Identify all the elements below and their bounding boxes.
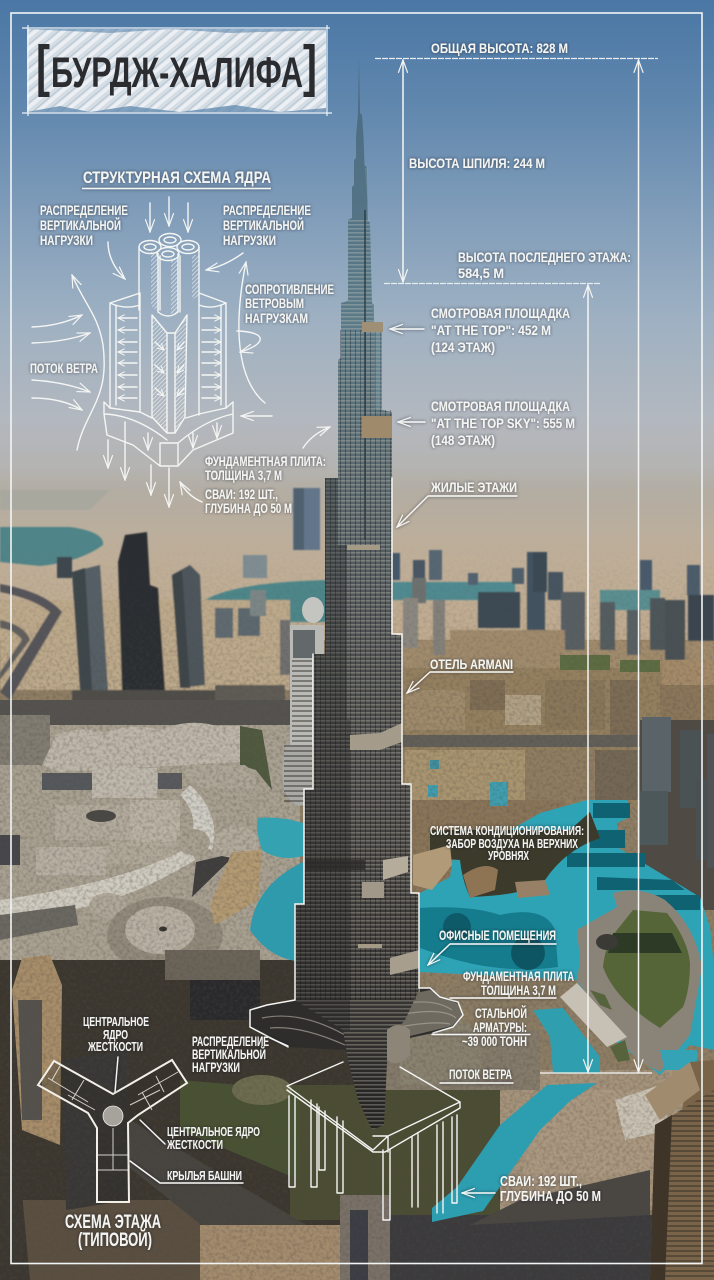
tower: shaded left shaft xyxy=(295,478,350,1030)
dimension: ground line xyxy=(540,1072,652,1074)
label: piles (diagram): ГЛУБИНА ДО 50 М xyxy=(205,500,292,516)
title text: ] xyxy=(303,34,317,98)
tower: lit tiers right xyxy=(383,990,462,1042)
heading: floor plan: (ТИПОВОЙ) xyxy=(78,1229,152,1251)
label: central core side xyxy=(140,1120,260,1152)
tower: dark plant band left xyxy=(305,860,365,870)
tower: main silhouette xyxy=(295,57,419,1130)
callout: air conditioning: УРОВНЯХ xyxy=(488,848,529,863)
label: wind resistance: СОПРОТИВЛЕНИЕ xyxy=(245,281,334,297)
background: desert xyxy=(0,462,714,702)
callout: residential floors: ЖИЛЫЕ ЭТАЖИ xyxy=(430,479,517,495)
core: wind arrows xyxy=(32,262,272,450)
callout: At the Top Sky: "AT THE TOP SKY": 555 М xyxy=(431,415,575,431)
background: sky xyxy=(0,0,714,500)
tower: window grid xyxy=(295,220,419,1130)
tower: mechanical band 2 xyxy=(383,856,408,880)
label: central core top: ЖЕСТКОСТИ xyxy=(87,1039,143,1054)
tower base outline left xyxy=(250,654,313,1047)
core: curved load arrows xyxy=(108,242,243,279)
tower: mechanical band 3 xyxy=(362,882,384,898)
floor inner partitions xyxy=(48,1066,178,1170)
label: central core top: ЦЕНТРАЛЬНОЕ xyxy=(83,1014,149,1029)
background: city quarter right of the tower xyxy=(395,655,714,910)
dimension: top floor height: 584,5 М xyxy=(458,265,504,281)
title plate xyxy=(22,25,332,116)
core: V block hatch xyxy=(152,315,187,433)
label: tower wings: КРЫЛЬЯ БАШНИ xyxy=(167,1168,242,1183)
callout: At the Top: "AT THE TOP": 452 М xyxy=(431,322,551,338)
label: wind resistance: НАГРУЗКАМ xyxy=(245,310,308,326)
label: vertical load left xyxy=(40,202,128,248)
background: ground, parks and plaza xyxy=(0,950,714,1280)
title text: БУРДЖ-ХАЛИФА xyxy=(51,49,303,97)
label: vertical load right: ВЕРТИКАЛЬНОЙ xyxy=(223,216,304,233)
label: foundation slab (diagram) xyxy=(205,453,326,483)
floor hub xyxy=(103,1106,123,1126)
callout: At the Top Sky xyxy=(398,398,575,448)
callout: air conditioning xyxy=(430,823,584,863)
background: base ground xyxy=(0,640,714,1280)
core: internal load arrows xyxy=(118,318,221,398)
label: vertical load left: ВЕРТИКАЛЬНОЙ xyxy=(40,216,121,233)
callout: piles: ГЛУБИНА ДО 50 М xyxy=(500,1188,601,1205)
core: top load arrows xyxy=(150,197,188,232)
label: vertical load right: РАСПРЕДЕЛЕНИЕ xyxy=(223,202,311,218)
label: foundation slab (diagram): ТОЛЩИНА 3,7 М xyxy=(205,467,282,483)
callout: piles: СВАИ: 192 ШТ., xyxy=(500,1173,582,1190)
callout: vertical load distribution: ВЕРТИКАЛЬНОЙ xyxy=(192,1045,266,1062)
callout: piles xyxy=(462,1173,601,1205)
callout: office floors: ОФИСНЫЕ ПОМЕЩЕНИЯ xyxy=(439,927,556,943)
callout: Armani hotel xyxy=(407,656,513,693)
callout: steel reinforcement: ~39 000 ТОНН xyxy=(462,1033,527,1049)
callout: vertical load distribution: НАГРУЗКИ xyxy=(192,1059,240,1075)
tower: concrete drum xyxy=(387,1025,410,1063)
diagram: foundation plate and piles xyxy=(287,1062,460,1220)
callout: air conditioning: ЗАБОР ВОЗДУХА НА ВЕРХНИХ xyxy=(446,836,578,851)
tower: mechanical band 1 xyxy=(350,723,402,750)
tower: vertical mullions xyxy=(295,330,419,1000)
dimension: spire height: ВЫСОТА ШПИЛЯ: 244 М xyxy=(409,155,545,171)
callout: vertical load distribution xyxy=(192,1033,288,1075)
background: island and green park xyxy=(413,812,702,1072)
tower: gold sky-lobby band xyxy=(362,322,383,332)
label: vertical load left: НАГРУЗКИ xyxy=(40,232,93,248)
label: piles (diagram) xyxy=(205,486,292,516)
callout: steel reinforcement: АРМАТУРЫ: xyxy=(473,1019,527,1035)
core: centre V block xyxy=(152,315,187,433)
callout: Armani hotel: ОТЕЛЬ ARMANI xyxy=(430,656,513,672)
tower: podium tiers xyxy=(250,988,463,1060)
heading: structural core scheme: СТРУКТУРНАЯ СХЕМА ЯДРА xyxy=(83,168,271,187)
tower: dark centre slot xyxy=(364,210,366,540)
label: wind resistance: ВЕТРОВЫМ xyxy=(245,295,304,311)
texture: city detail noise xyxy=(0,540,714,1280)
label: vertical load right xyxy=(223,202,311,248)
tower: tier lines xyxy=(262,1002,456,1045)
tower: lit right edge upper xyxy=(365,168,382,410)
title text: [ xyxy=(36,34,50,98)
label: central core side: ЖЕСТКОСТИ xyxy=(166,1137,223,1152)
diagram: typical floor plan xyxy=(38,1060,187,1202)
tower: centre wing top xyxy=(347,545,380,550)
dimension: top floor height xyxy=(384,249,631,1072)
dimension: total height: ОБЩАЯ ВЫСОТА: 828 М xyxy=(431,40,568,56)
background: far city and towers xyxy=(0,488,714,725)
label: vertical load left: РАСПРЕДЕЛЕНИЕ xyxy=(40,202,128,218)
background: mall district xyxy=(0,700,300,990)
plate outline xyxy=(287,1062,460,1152)
tower: Burj Khalifa xyxy=(250,57,463,1130)
label: piles (diagram): СВАИ: 192 ШТ., xyxy=(205,486,278,502)
background: right-side high-rises xyxy=(640,717,714,1280)
background: lagoons and fountain pools xyxy=(250,800,714,1222)
callout: steel reinforcement: СТАЛЬНОЙ xyxy=(475,1004,527,1021)
label: wind flow: ПОТОК ВЕТРА xyxy=(30,360,98,376)
label: central core side: ЦЕНТРАЛЬНОЕ ЯДРО xyxy=(167,1124,260,1139)
tower: top of third wing xyxy=(358,944,382,948)
diagram: structural core xyxy=(32,197,330,507)
label: vertical load right: НАГРУЗКИ xyxy=(223,232,276,248)
dimension: top floor height: ВЫСОТА ПОСЛЕДНЕГО ЭТАЖА: xyxy=(458,249,631,265)
label: central core top xyxy=(83,1014,149,1092)
callout: At the Top xyxy=(390,305,570,355)
core: foundation arrows xyxy=(108,422,217,507)
label: central core top: ЯДРО xyxy=(103,1027,128,1042)
label: foundation slab (diagram): ФУНДАМЕНТНАЯ ПЛИТА: xyxy=(205,453,326,469)
core: leader arrows xyxy=(180,427,330,502)
callout: wind flow xyxy=(440,1066,513,1083)
tower: lower gold band xyxy=(362,416,392,438)
tower: outline highlight xyxy=(392,478,463,1033)
title text xyxy=(36,34,317,98)
callout: At the Top Sky: СМОТРОВАЯ ПЛОЩАДКА xyxy=(431,398,570,414)
callout: foundation slab: ФУНДАМЕНТНАЯ ПЛИТА xyxy=(463,968,574,984)
heading: floor plan xyxy=(65,1212,161,1251)
callout: At the Top Sky: (148 ЭТАЖ) xyxy=(431,432,495,448)
callout: residential floors xyxy=(397,479,517,527)
callout: At the Top: (124 ЭТАЖ) xyxy=(431,339,495,355)
core: tubes xyxy=(139,234,199,316)
callout: air conditioning: СИСТЕМА КОНДИЦИОНИРОВАНИЯ: xyxy=(430,823,584,838)
callout: At the Top: СМОТРОВАЯ ПЛОЩАДКА xyxy=(431,305,570,321)
heading: floor plan: СХЕМА ЭТАЖА xyxy=(65,1212,161,1233)
callout: wind flow: ПОТОК ВЕТРА xyxy=(449,1066,512,1082)
callout: foundation slab xyxy=(450,968,574,998)
floor outline xyxy=(38,1060,187,1202)
callout: steel reinforcement xyxy=(432,1004,530,1049)
building: Address hotel tower xyxy=(282,597,324,806)
tower: mechanical band 4 xyxy=(390,950,419,975)
callout: foundation slab: ТОЛЩИНА 3,7 М xyxy=(481,982,556,998)
callout: office floors xyxy=(428,927,556,965)
label: tower wings xyxy=(130,1161,243,1183)
label: wind resistance xyxy=(245,281,334,326)
callout: vertical load distribution: РАСПРЕДЕЛЕНИЕ xyxy=(192,1033,269,1049)
piles xyxy=(289,1096,457,1220)
core: wings and base xyxy=(110,293,226,415)
core: foundation slab xyxy=(104,402,233,466)
